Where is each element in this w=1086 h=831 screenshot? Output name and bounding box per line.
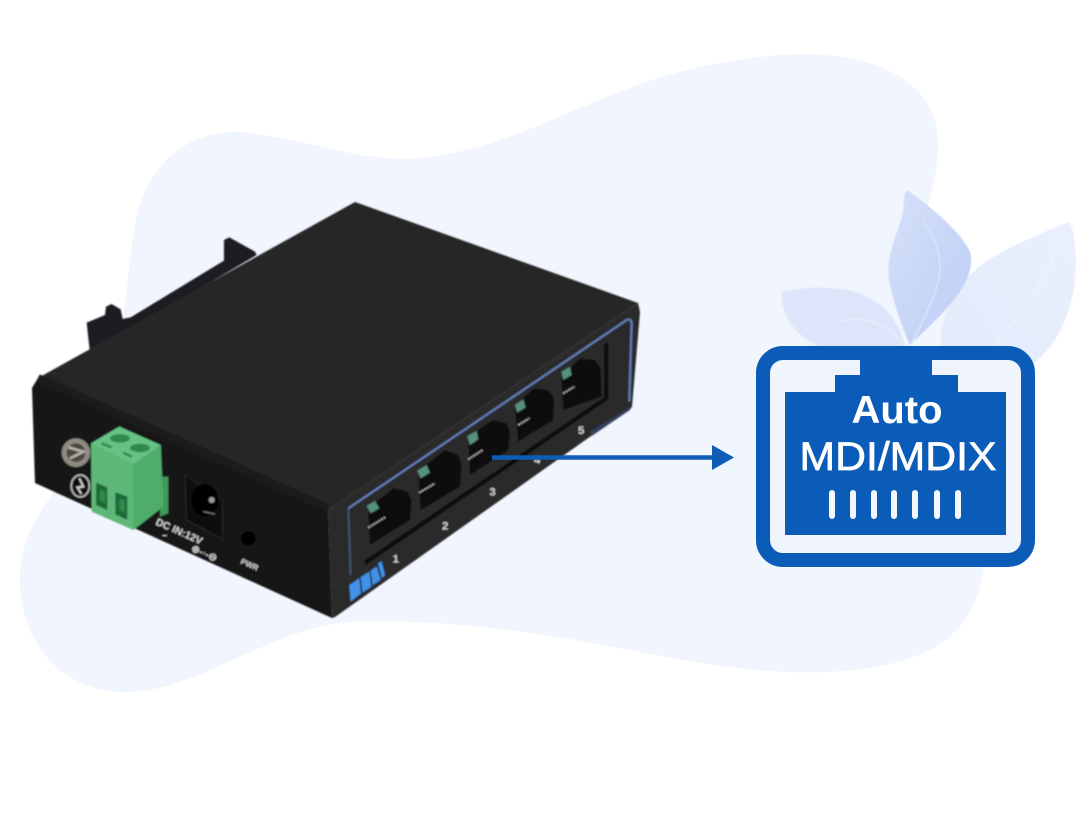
port label: MDI/MDIX <box>800 435 996 479</box>
top face front edge <box>38 378 328 508</box>
RJ45 ports <box>368 358 602 545</box>
icon: leaves <box>782 190 1076 379</box>
port numbers: 3 <box>489 486 496 498</box>
silk labels: DC IN:12V <box>154 517 204 547</box>
leaf: left <box>782 288 905 347</box>
port contacts <box>368 387 574 528</box>
ground symbol <box>71 475 89 497</box>
grounding screw <box>62 438 90 467</box>
leaf: right <box>941 222 1076 379</box>
silk labels: PWR <box>239 557 260 573</box>
silk labels <box>154 517 260 573</box>
port LEDs <box>367 367 572 513</box>
icon: Auto MDI/MDIX port <box>763 352 1028 560</box>
arrow <box>492 445 734 470</box>
right face details <box>348 320 632 602</box>
port numbers: 4 <box>534 454 541 466</box>
leaf: center <box>888 190 971 345</box>
port label: Auto <box>852 389 942 432</box>
blue trim line <box>348 320 632 508</box>
port pins <box>829 490 961 519</box>
left face <box>32 378 332 618</box>
green terminal block <box>91 427 168 530</box>
top face <box>36 202 638 510</box>
power LED <box>241 531 256 546</box>
port numbers: 1 <box>393 554 399 566</box>
port outer frame <box>763 353 1028 560</box>
port numbers <box>393 425 584 566</box>
DC jack <box>185 475 223 539</box>
port numbers: 5 <box>578 425 584 437</box>
DIN rail clip <box>87 237 257 353</box>
side foot <box>590 407 632 436</box>
device: industrial ethernet switch <box>32 202 640 618</box>
port body <box>785 352 1006 535</box>
port numbers: 2 <box>442 520 448 532</box>
silk labels: ⊕-◦-⊖ <box>189 543 218 564</box>
port recess <box>364 342 608 565</box>
blue clip <box>349 561 385 602</box>
silk labels: − <box>162 530 167 540</box>
background blob <box>20 54 989 692</box>
port label <box>800 389 996 479</box>
right face <box>328 303 640 618</box>
left face details <box>62 427 260 573</box>
